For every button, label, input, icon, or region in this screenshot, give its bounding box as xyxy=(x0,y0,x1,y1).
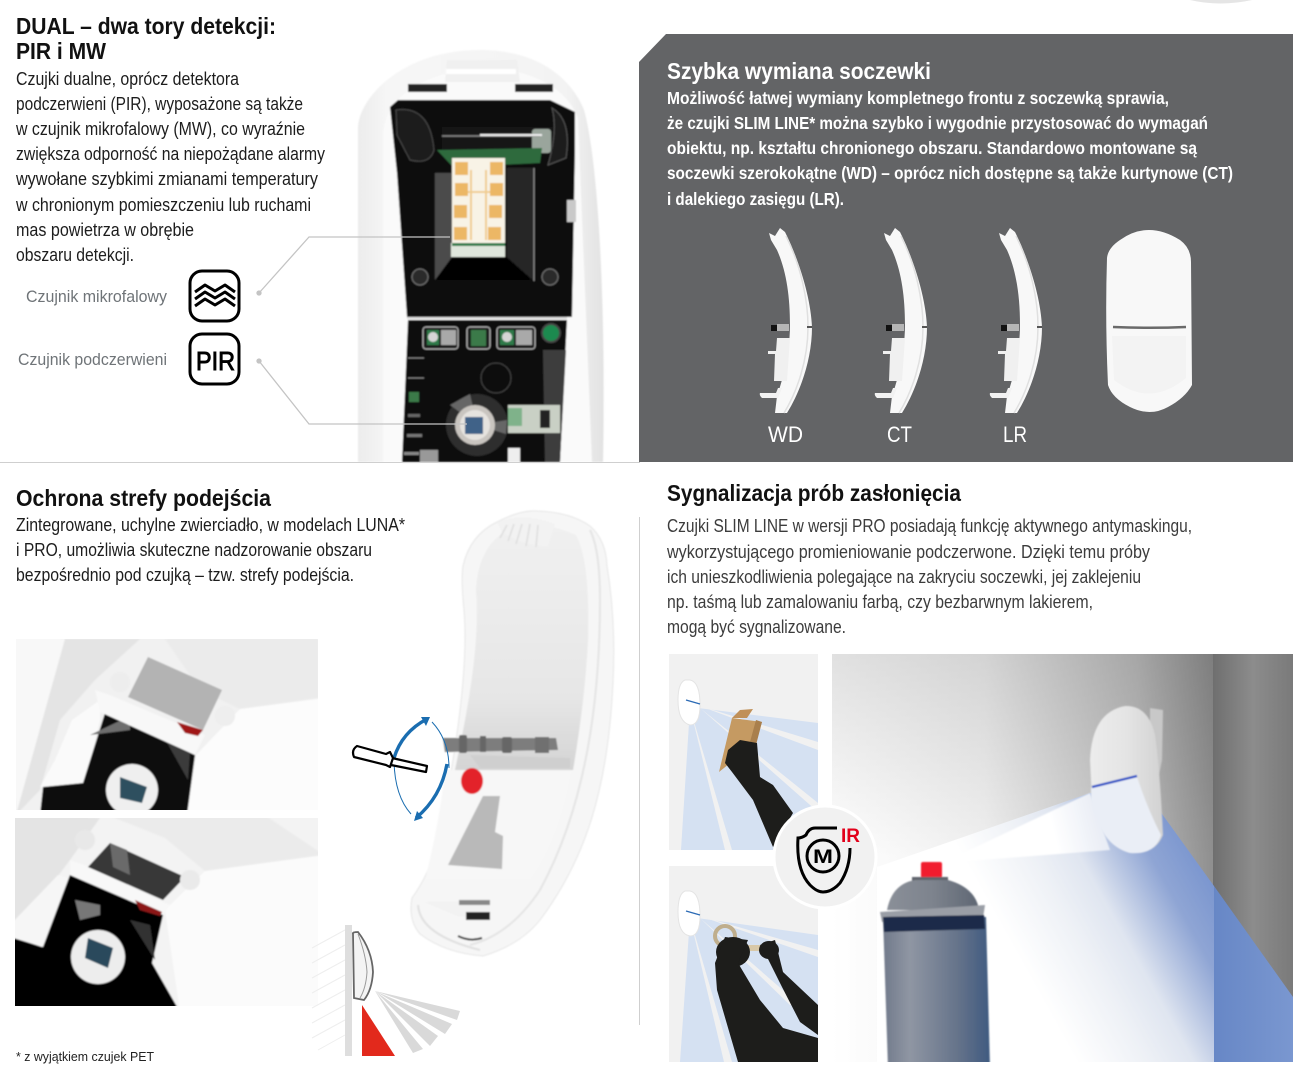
text block: DUAL description: mas powietrza w obrębie xyxy=(16,220,194,240)
text block: approach zone: i PRO, umożliwia skuteczne nadzorowanie obszaru xyxy=(16,540,372,560)
text block: DUAL description: w chronionym pomieszczeniu lub ruchami xyxy=(15,195,311,215)
text block: DUAL description: zwiększa odporność na niepożądane alarmy xyxy=(16,144,325,164)
front of detector xyxy=(1106,230,1192,412)
badge: IR antimasking xyxy=(774,806,876,908)
label: CT: CT xyxy=(887,422,912,447)
badge: IR antimasking: M xyxy=(813,847,833,868)
vertical divider xyxy=(638,517,640,1025)
arrows: mirror rotation xyxy=(394,717,449,821)
heading: Ochrona strefy podejścia: Ochrona strefy podejścia xyxy=(16,485,271,511)
icon: microwave sensor xyxy=(190,271,239,321)
text block: lens description: że czujki SLIM LINE* można szybko i wygodnie przystosować do wymagań xyxy=(667,113,1208,133)
infrared beam on side wall xyxy=(1214,886,1293,1062)
illustration: covering with box xyxy=(669,654,818,850)
text block: antimasking xyxy=(666,516,1192,637)
label: WD: WD xyxy=(768,422,803,447)
label: LR: LR xyxy=(1003,422,1027,447)
lens: LR xyxy=(990,228,1042,413)
text block: approach zone: bezpośrednio pod czujką – tzw. strefy podejścia. xyxy=(16,565,354,585)
heading: DUAL: DUAL – dwa tory detekcji: xyxy=(16,13,276,39)
label: Czujnik mikrofalowy: Czujnik mikrofalowy xyxy=(26,287,167,306)
footnote: * z wyjątkiem czujek PET xyxy=(16,1049,154,1064)
image: sensor interior xyxy=(358,50,604,462)
spray can xyxy=(880,862,990,1068)
text block: antimasking: np. taśmą lub zamalowaniu farbą, czy bezbarwnym lakierem, xyxy=(667,592,1093,612)
panel: DUAL text xyxy=(15,13,325,265)
text block: DUAL description: podczerwieni (PIR), wyposażone są także xyxy=(16,94,303,114)
text block: lens description: i dalekiego zasięgu (LR). xyxy=(667,189,844,209)
badge: IR antimasking: IR xyxy=(841,826,860,847)
text block: DUAL description xyxy=(15,69,325,265)
panel: lens replacement xyxy=(639,34,1293,462)
illustration: covering with tape xyxy=(669,866,818,1062)
spray cloud xyxy=(989,792,1110,858)
leader lines xyxy=(257,237,467,424)
detector on wall xyxy=(1090,706,1163,853)
photo: mirror open xyxy=(10,812,324,1012)
text block: DUAL description: obszaru detekcji. xyxy=(16,245,134,265)
text block: DUAL description: Czujki dualne, oprócz detektora xyxy=(16,69,240,89)
diagram: side view of detector with detection zones xyxy=(312,925,460,1056)
heading: Sygnalizacja prób zasłonięcia: Sygnalizacja prób zasłonięcia xyxy=(667,480,961,506)
icon: screwdriver xyxy=(353,746,427,772)
heading: DUAL xyxy=(16,13,276,64)
text block: approach zone: Zintegrowane, uchylne zwierciadło, w modelach LUNA* xyxy=(16,515,405,535)
text block: DUAL description: w czujnik mikrofalowy (MW), co wyraźnie xyxy=(15,119,305,139)
text block: antimasking: wykorzystującego promieniowanie podczerwone. Dzięki temu próby xyxy=(666,542,1150,562)
infrared beam on wall xyxy=(914,793,1214,1062)
text block: lens description: obiektu, np. kształtu chronionego obszaru. Standardowo montowane są xyxy=(667,138,1197,158)
photo: mirror closed xyxy=(16,639,318,810)
icon: PIR sensor xyxy=(190,334,239,384)
photo: spray can masking detector xyxy=(832,654,1293,1068)
text block: antimasking: ich unieszkodliwienia polegające na zakryciu soczewki, jej zaklejeniu xyxy=(667,567,1141,587)
lens: WD xyxy=(760,228,812,413)
text block: lens description: soczewki szerokokątne (WD) – oprócz nich dostępne są także kurtynowe (CT) xyxy=(667,163,1233,183)
label: Czujnik podczerwieni: Czujnik podczerwieni xyxy=(18,350,167,369)
text block: lens description xyxy=(667,88,1233,209)
lens: CT xyxy=(875,228,927,413)
divider xyxy=(0,462,640,464)
image: open detector with mirror xyxy=(411,511,614,956)
text block: DUAL description: wywołane szybkimi zmianami temperatury xyxy=(15,169,318,189)
heading: DUAL: PIR i MW xyxy=(16,38,106,64)
text block: approach zone xyxy=(16,515,405,585)
text block: antimasking: mogą być sygnalizowane. xyxy=(667,617,846,637)
text block: antimasking: Czujki SLIM LINE w wersji PRO posiadają funkcję aktywnego antymaskingu, xyxy=(667,516,1192,536)
top-edge product fragment xyxy=(1190,0,1252,4)
icon: PIR sensor: PIR xyxy=(196,346,235,376)
heading: Szybka wymiana soczewki: Szybka wymiana soczewki xyxy=(667,58,931,84)
text block: lens description: Możliwość łatwej wymiany kompletnego frontu z soczewką sprawia, xyxy=(667,88,1169,108)
